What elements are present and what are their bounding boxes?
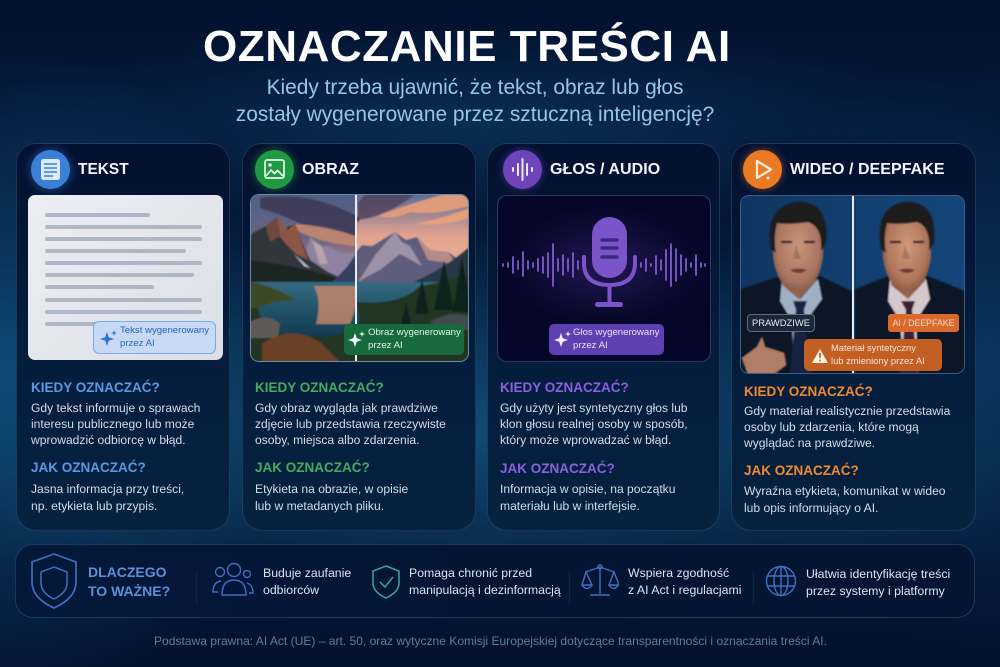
icon: image — [255, 150, 294, 189]
text: wspiera zgodność — [628, 566, 741, 597]
text: jak oznaczać (tekst) — [31, 482, 184, 513]
icon: scales — [581, 564, 619, 596]
warning: materiał syntetyczny: lub zmieniony przez AI — [831, 355, 925, 366]
text: kiedy oznaczać (głos): klon głosu realnej osoby w sposób, — [500, 417, 688, 431]
text: kiedy oznaczać (wideo) — [744, 404, 950, 450]
heading: wideo / deepfake: WIDEO / DEEPFAKE — [790, 161, 945, 178]
text: pomaga chronić: manipulacją i dezinformacją — [409, 583, 561, 597]
text: jak oznaczać (tekst): Jasna informacja przy treści, — [31, 482, 184, 496]
panel: obraz — [242, 143, 476, 531]
text: jak oznaczać (obraz): Etykieta na obrazie, w opisie — [255, 482, 408, 496]
text: buduje zaufanie: odbiorców — [263, 583, 319, 597]
question: kiedy oznaczać (głos): KIEDY OZNACZAĆ? — [500, 380, 629, 395]
text: jak oznaczać (wideo): lub opis informujący o AI. — [744, 501, 878, 515]
subtitle: zostały wygenerowane przez sztuczną inteligencję? — [236, 103, 714, 126]
text: kiedy oznaczać (głos) — [500, 401, 688, 447]
label: ai / deepfake — [888, 314, 959, 332]
text: ułatwia identyfikację: przez systemy i platformy — [806, 584, 945, 598]
text: jak oznaczać (obraz) — [255, 482, 408, 513]
text: jak oznaczać (głos) — [500, 482, 675, 513]
text: pomaga chronić: Pomaga chronić przed — [409, 566, 532, 580]
label: obraz wygenerowany przez AI: przez AI — [368, 340, 403, 350]
heading: dlaczego to ważne: DLACZEGO — [88, 564, 167, 580]
question: jak oznaczać (obraz): JAK OZNACZAĆ? — [255, 460, 370, 475]
icon: audio wave — [503, 150, 542, 189]
text: buduje zaufanie — [263, 566, 351, 597]
subtitle: Kiedy trzeba ujawnić, że tekst, obraz lub głos — [267, 76, 683, 99]
text: pomaga chronić — [409, 566, 561, 597]
text: kiedy oznaczać (wideo): osoby lub zdarzenia, które mogą — [744, 420, 919, 434]
heading: obraz: OBRAZ — [302, 161, 359, 178]
left person — [740, 202, 852, 374]
text: kiedy oznaczać (głos): Gdy użyty jest syntetyczny głos lub — [500, 401, 688, 415]
icon: text document — [31, 150, 70, 189]
question: kiedy oznaczać (obraz): KIEDY OZNACZAĆ? — [255, 380, 384, 395]
text: kiedy oznaczać (wideo): Gdy materiał realistycznie przedstawia — [744, 404, 950, 418]
legal footnote: Podstawa prawna: AI Act (UE) – art. 50, oraz wytyczne Komisji Europejskiej dotyczące transparentności i oznaczania treści AI. — [154, 634, 827, 648]
panel: głos / audio — [487, 143, 720, 531]
heading: tekst: TEKST — [78, 161, 129, 178]
text: ułatwia identyfikację: Ułatwia identyfikację treści — [806, 567, 950, 581]
label: tekst wygenerowany przez AI: przez AI — [120, 338, 155, 348]
label: tekst wygenerowany przez AI — [93, 321, 216, 354]
text: kiedy oznaczać (obraz): zdjęcie lub przedstawia rzeczywiste — [255, 417, 446, 431]
text: kiedy oznaczać (obraz): osoby, miejsca albo zdarzenia. — [255, 433, 419, 447]
label: głos wygenerowany przez AI: przez AI — [573, 340, 608, 350]
text: kiedy oznaczać (wideo): wyglądać na prawdziwe. — [744, 436, 875, 450]
question: jak oznaczać (wideo): JAK OZNACZAĆ? — [744, 463, 859, 478]
text: kiedy oznaczać (obraz) — [255, 401, 446, 447]
text: jak oznaczać (wideo) — [744, 484, 946, 515]
heading: dlaczego to ważne: TO WAŻNE? — [88, 583, 170, 599]
panel: wideo / deepfake — [731, 143, 976, 531]
question: jak oznaczać (tekst): JAK OZNACZAĆ? — [31, 460, 146, 475]
illustration: microphone with waveform — [497, 195, 711, 362]
subtitle — [236, 76, 714, 126]
label: prawdziwe — [747, 314, 815, 332]
text: jak oznaczać (głos): Informacja w opisie, na początku — [500, 482, 675, 496]
text: kiedy oznaczać (głos): który może wprowadzać w błąd. — [500, 433, 671, 447]
text: kiedy oznaczać (tekst): wprowadzić odbiorcę w błąd. — [31, 433, 186, 447]
icon: people — [212, 562, 254, 596]
title: OZNACZANIE TREŚCI AI — [203, 22, 731, 71]
text: kiedy oznaczać (tekst): interesu publicznego lub może — [31, 417, 194, 431]
text: ułatwia identyfikację — [806, 567, 950, 598]
label: prawdziwe: PRAWDZIWE — [752, 317, 810, 328]
text: wspiera zgodność: Wspiera zgodność — [628, 566, 729, 580]
label: ai / deepfake: AI / DEEPFAKE — [892, 318, 955, 328]
text document mockup — [28, 195, 223, 360]
right person — [855, 202, 965, 374]
text: kiedy oznaczać (obraz): Gdy obraz wygląda jak prawdziwe — [255, 401, 438, 415]
text: wspiera zgodność: z AI Act i regulacjami — [628, 583, 741, 597]
text: jak oznaczać (głos): materiału lub w interfejsie. — [500, 499, 640, 513]
label: głos wygenerowany przez AI — [549, 324, 664, 355]
question: kiedy oznaczać (wideo): KIEDY OZNACZAĆ? — [744, 384, 873, 399]
label: tekst wygenerowany przez AI: Tekst wygenerowany — [120, 325, 209, 336]
panel: dlaczego to ważne — [15, 544, 975, 618]
text: jak oznaczać (tekst): np. etykieta lub przypis. — [31, 499, 157, 513]
icon: globe — [766, 566, 796, 596]
warning: materiał syntetyczny — [804, 339, 942, 371]
image: real vs deepfake video — [740, 195, 965, 374]
label: obraz wygenerowany przez AI: Obraz wygenerowany — [368, 327, 461, 338]
heading: dlaczego to ważne — [88, 564, 170, 599]
text: kiedy oznaczać (tekst): Gdy tekst informuje o sprawach — [31, 401, 200, 415]
panel: tekst — [16, 143, 230, 531]
text: jak oznaczać (wideo): Wyraźna etykieta, komunikat w wideo — [744, 484, 946, 498]
label: obraz wygenerowany przez AI — [344, 324, 464, 355]
warning: materiał syntetyczny: Materiał syntetyczny — [831, 342, 916, 353]
image: landscape comparison — [250, 194, 469, 362]
text: buduje zaufanie: Buduje zaufanie — [263, 566, 351, 580]
text: kiedy oznaczać (tekst) — [31, 401, 200, 447]
heading: głos / audio: GŁOS / AUDIO — [550, 161, 660, 178]
icon: video play — [743, 150, 782, 189]
icon: shield — [31, 553, 77, 609]
question: kiedy oznaczać (tekst): KIEDY OZNACZAĆ? — [31, 380, 160, 395]
question: jak oznaczać (głos): JAK OZNACZAĆ? — [500, 461, 615, 476]
label: głos wygenerowany przez AI: Głos wygenerowany — [573, 327, 659, 338]
text: jak oznaczać (obraz): lub w metadanych pliku. — [255, 499, 384, 513]
icon: shield check — [372, 565, 400, 599]
